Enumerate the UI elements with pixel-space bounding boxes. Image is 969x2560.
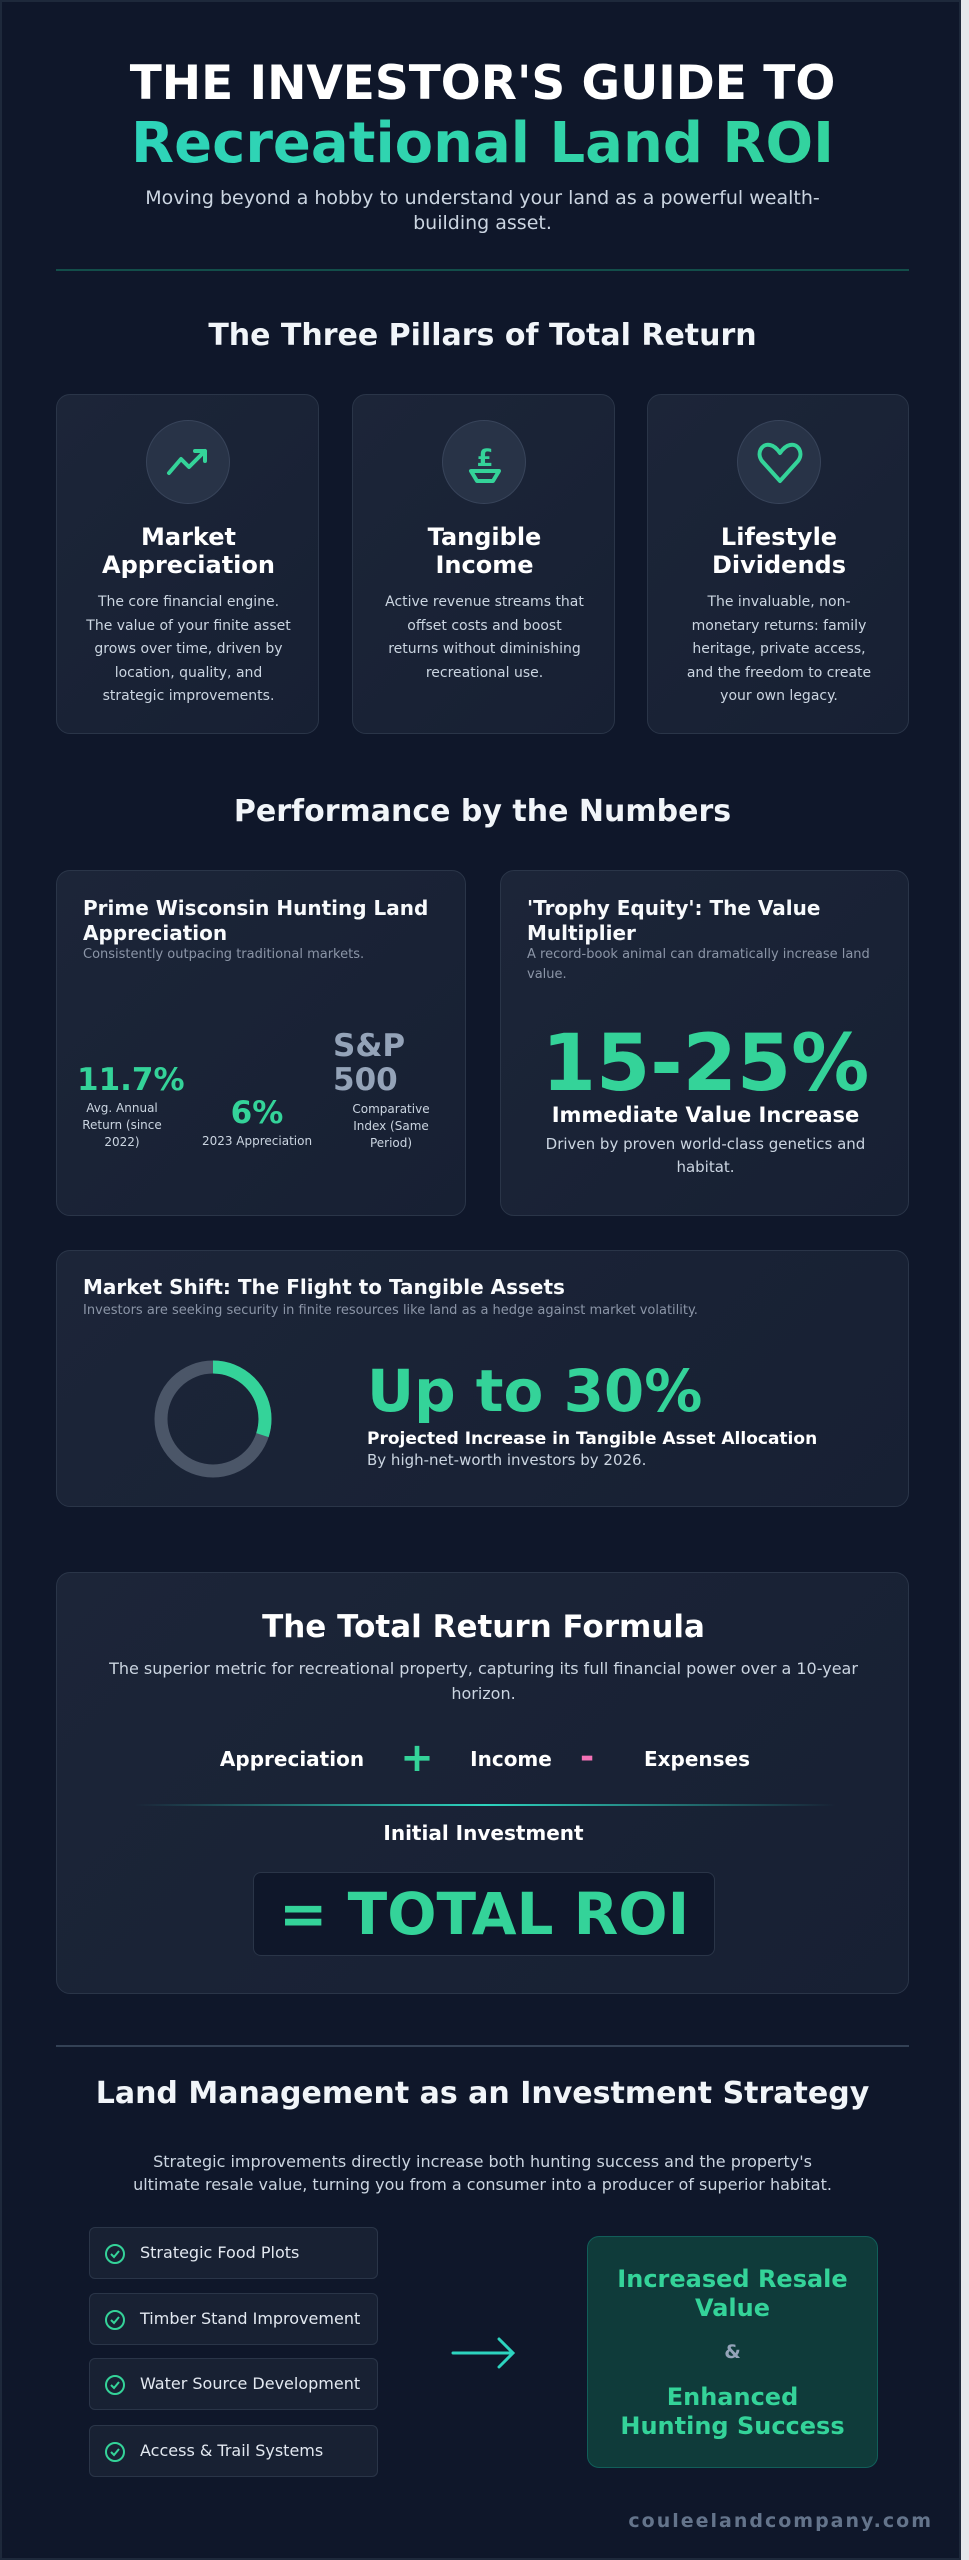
text: Active revenue streams that offset costs and boost returns without diminishing recreational use.: [385, 594, 584, 680]
panel: total return formula: The superior metric for recreational property, capturing its full financial power over a 10-year horizon.: [109, 1659, 858, 1703]
panel: wisconsin appreciation: [56, 870, 466, 1216]
stat: 11.7%: 11.7%: [77, 1062, 185, 1098]
stat: up to 30%: Projected Increase in Tangible Asset Allocation: [367, 1429, 817, 1449]
result box: &: [724, 2341, 741, 2363]
result box: Increased Resale: [617, 2265, 848, 2293]
arrow: [452, 2337, 515, 2369]
panel: trophy equity: A record-book animal can dramatically increase land value.: [527, 947, 870, 982]
stat: 6%: [202, 1095, 312, 1148]
paragraph: Strategic improvements directly increase both hunting success and the property's ultimate resale value, turning you from a consumer into a producer of superior habitat.: [133, 2152, 832, 2194]
title: [428, 523, 541, 579]
subtitle: Moving beyond a hobby to understand your land as a powerful wealth-building asset.: [145, 187, 820, 234]
result box: Hunting Success: [620, 2412, 845, 2440]
title: Recreational Land ROI: [131, 111, 834, 176]
item: access: Access & Trail Systems: [140, 2441, 323, 2460]
stat: S&P 500: Comparative Index (Same Period): [352, 1102, 430, 1150]
panel: wisconsin appreciation: Consistently outpacing traditional markets.: [83, 947, 364, 962]
text: The invaluable, non-monetary returns: family heritage, private access, and the freedom to create your own legacy.: [687, 594, 871, 704]
panel: market appreciation: [56, 394, 319, 734]
title: Tangible: [428, 523, 541, 551]
heading: land management: Land Management as an Investment Strategy: [96, 2076, 869, 2111]
title: [102, 523, 275, 579]
panel: trophy equity: Immediate Value Increase: [552, 1103, 859, 1127]
footer: couleelandcompany.com: [628, 2510, 933, 2532]
item: water: [89, 2358, 378, 2410]
stat: S&P 500: S&P: [333, 1028, 405, 1064]
panel: market shift: Market Shift: The Flight to Tangible Assets: [83, 1275, 565, 1299]
panel: total return formula: [56, 1572, 909, 1994]
title: [712, 523, 846, 579]
formula: Income: [470, 1747, 552, 1771]
text: The core financial engine. The value of your finite asset grows over time, driven by location, quality, and strategic improvements.: [86, 594, 291, 704]
panel: lifestyle dividends: [647, 394, 909, 734]
stat: S&P 500: 500: [333, 1062, 398, 1098]
title: Income: [435, 551, 534, 579]
result box: Value: [695, 2294, 770, 2322]
stat: S&P 500: [333, 1028, 430, 1150]
title: Dividends: [712, 551, 846, 579]
formula: -: [580, 1737, 594, 1777]
icon: trending up: [146, 420, 230, 504]
stat: 11.7%: Avg. Annual Return (since 2022): [82, 1101, 162, 1149]
result box: Enhanced: [667, 2383, 798, 2411]
item: access: [89, 2425, 378, 2477]
stat: up to 30%: [367, 1357, 817, 1469]
stat: 6%: 2023 Appreciation: [202, 1134, 312, 1148]
formula: [220, 1735, 750, 1781]
result box: [587, 2236, 878, 2468]
heading: three pillars: The Three Pillars of Total Return: [208, 318, 757, 353]
item: food plots: Strategic Food Plots: [140, 2243, 299, 2262]
formula: Expenses: [644, 1747, 750, 1771]
icon: heart: [737, 420, 821, 504]
formula: +: [400, 1735, 434, 1781]
panel: total return formula: The Total Return Formula: [262, 1609, 705, 1645]
stat: up to 30%: By high-net-worth investors by 2026.: [367, 1451, 646, 1469]
panel: market shift: Investors are seeking security in finite resources like land as a hedge against market volatility.: [83, 1303, 698, 1318]
panel: wisconsin appreciation: Prime Wisconsin Hunting Land Appreciation: [83, 896, 428, 945]
panel: trophy equity: [500, 870, 909, 1216]
item: timber: Timber Stand Improvement: [140, 2309, 360, 2328]
item: timber: [89, 2293, 378, 2345]
title: [130, 56, 835, 176]
panel: market shift: [56, 1250, 909, 1507]
panel: trophy equity: Driven by proven world-class genetics and habitat.: [546, 1135, 865, 1176]
stat: 6%: 6%: [231, 1095, 283, 1131]
list: improvements: [89, 2227, 378, 2477]
formula: Appreciation: [220, 1747, 364, 1771]
big stat: 15-25%: [542, 1019, 869, 1109]
stat: up to 30%: Up to 30%: [367, 1357, 702, 1425]
stat: 11.7%: [77, 1062, 185, 1149]
title: Market: [141, 523, 236, 551]
icon: income: £: [477, 444, 493, 472]
icon: income: [442, 420, 526, 504]
title: Lifestyle: [721, 523, 837, 551]
total roi box: = TOTAL ROI: [279, 1880, 689, 1948]
item: food plots: [89, 2227, 378, 2279]
donut chart: [154, 1360, 272, 1478]
title: Appreciation: [102, 551, 275, 579]
panel: total return formula: Initial Investment: [383, 1821, 584, 1845]
title: THE INVESTOR'S GUIDE TO: [130, 56, 835, 111]
heading: performance: Performance by the Numbers: [234, 794, 731, 829]
panel: trophy equity: 'Trophy Equity': The Value Multiplier: [527, 896, 820, 945]
item: water: Water Source Development: [140, 2374, 360, 2393]
panel: tangible income: [352, 394, 615, 734]
